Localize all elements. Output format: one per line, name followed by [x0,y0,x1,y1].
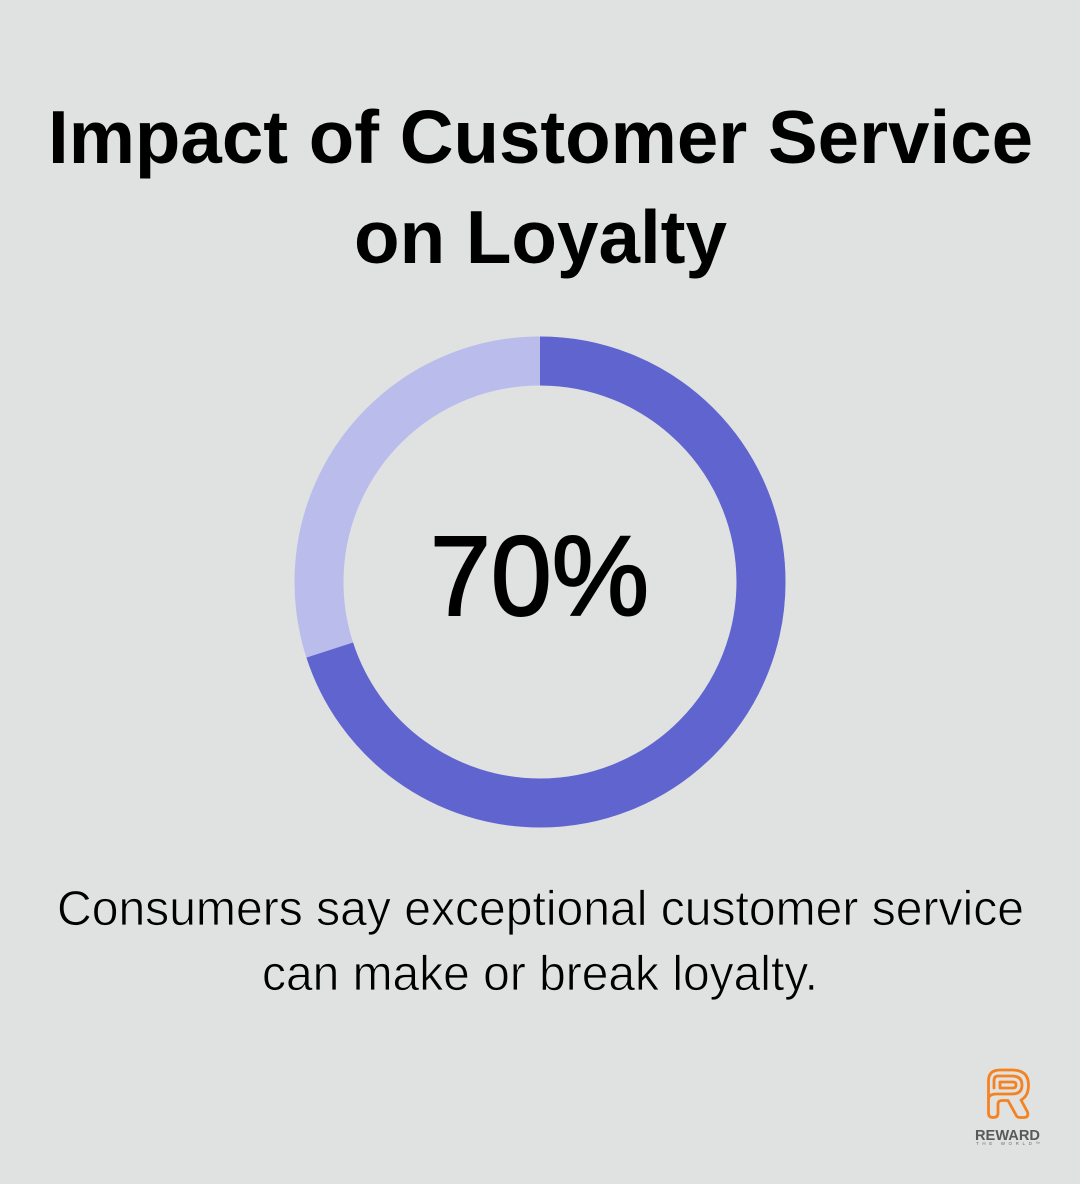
description text: Consumers say exceptional customer service [57,882,1024,936]
title: Impact of Customer Service [48,95,1033,179]
logo: Reward the World [975,1070,1040,1146]
donut chart: 70% [319,361,761,803]
logo tagline: THE WORLD™ [976,1141,1040,1146]
description text [57,882,1024,1001]
title: on Loyalty [354,195,727,279]
title [48,95,1033,279]
icon: orange R mark [988,1070,1028,1118]
description text: can make or break loyalty. [262,947,818,1001]
donut value: 70% [430,513,649,639]
logo wordmark: REWARD [975,1128,1040,1144]
